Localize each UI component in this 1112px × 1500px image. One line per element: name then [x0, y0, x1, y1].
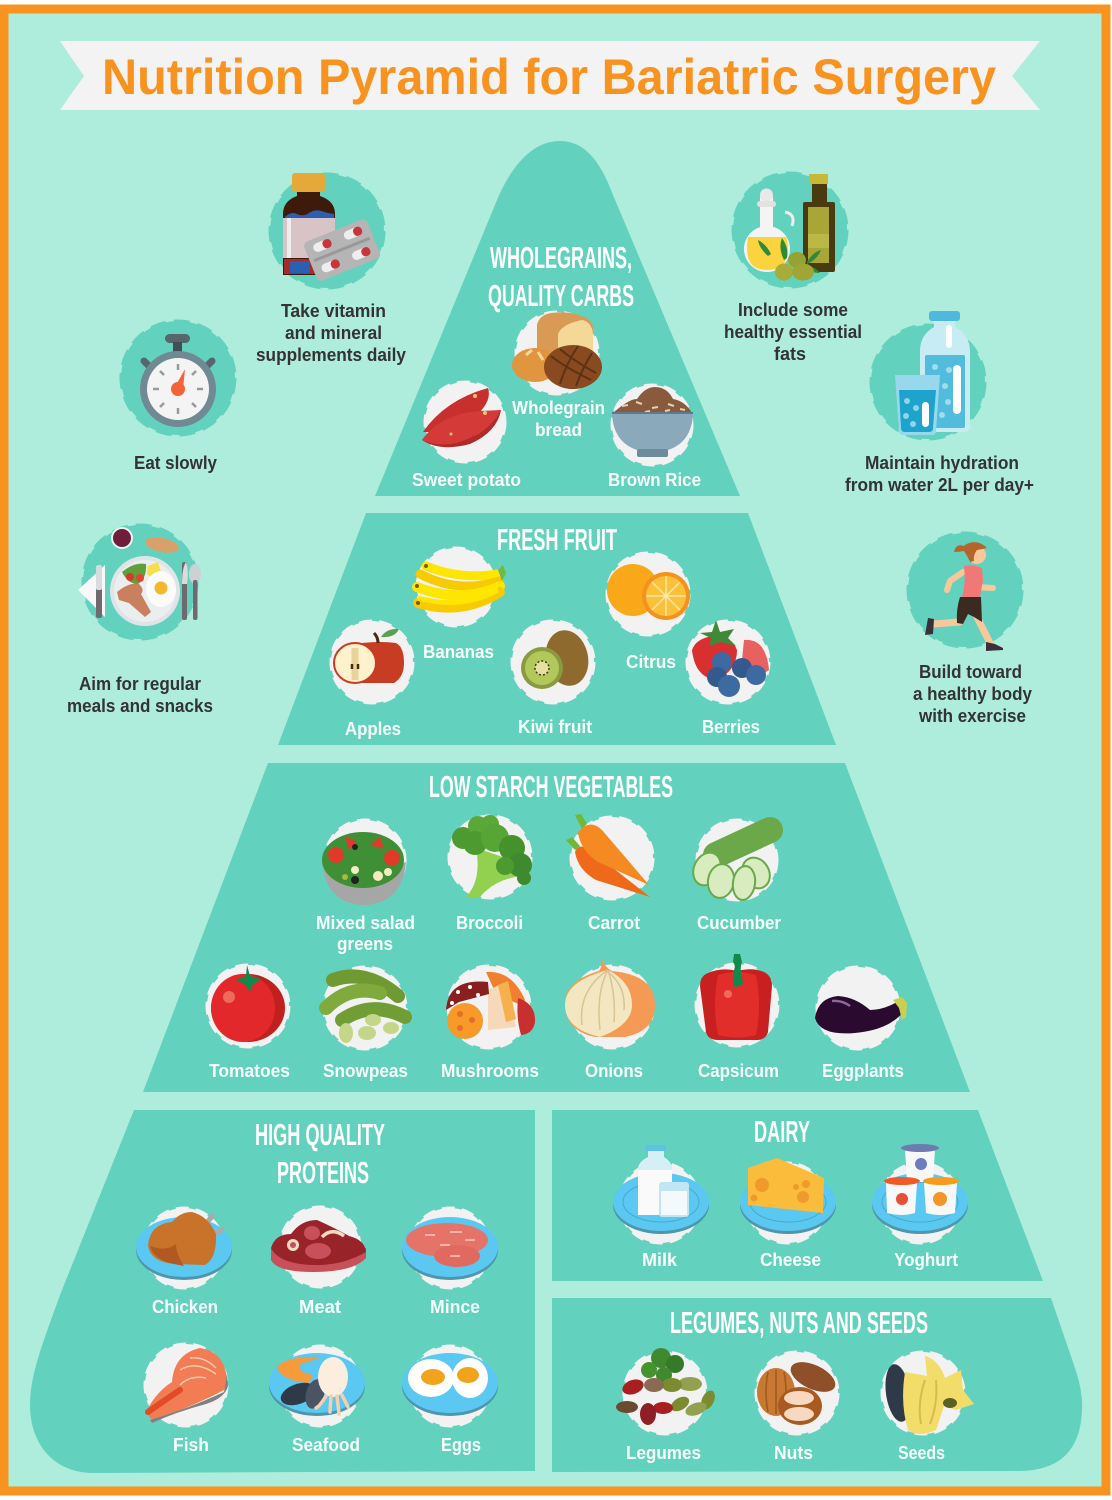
tip: vitamins: Take vitamin — [281, 301, 386, 321]
item: citrus — [607, 553, 690, 672]
item: mince — [402, 1208, 498, 1317]
item: meat — [271, 1207, 366, 1317]
item: tomatoes — [207, 965, 290, 1081]
heading: vegetables: LOW STARCH VEGETABLES — [429, 769, 673, 804]
tip: exercise: with exercise — [918, 706, 1026, 726]
item: chicken — [136, 1208, 232, 1317]
item: eggs — [402, 1346, 498, 1455]
tip: regular meals: Aim for regular — [79, 674, 201, 694]
tip: hydration: Maintain hydration — [865, 453, 1019, 473]
item: wholegrain bread: Wholegrain — [512, 398, 605, 418]
item: tomatoes: Tomatoes — [209, 1061, 290, 1081]
tip: regular meals: meals and snacks — [67, 696, 213, 716]
panel: fresh fruit — [278, 513, 836, 745]
item: seeds — [882, 1352, 974, 1463]
item: broccoli: Broccoli — [456, 913, 523, 933]
item: bananas: Bananas — [423, 642, 494, 662]
item: brown rice: Brown Rice — [608, 470, 701, 490]
panel: legumes, nuts and seeds — [552, 1298, 1082, 1472]
tip: essential fats: Include some — [738, 300, 848, 320]
tip: vitamins: and mineral — [285, 323, 382, 343]
item: eggplants: Eggplants — [822, 1061, 904, 1081]
heading: proteins: PROTEINS — [277, 1155, 369, 1190]
tip: exercise: a healthy body — [913, 684, 1032, 704]
item: seeds: Seeds — [898, 1443, 945, 1463]
item: fish — [145, 1344, 228, 1455]
tip: exercise: Build toward — [919, 662, 1022, 682]
item: yoghurt: Yoghurt — [894, 1250, 958, 1270]
item: carrot: Carrot — [588, 913, 640, 933]
item: mince: Mince — [430, 1297, 480, 1317]
tip: eat slowly — [121, 321, 235, 473]
item: wholegrain bread — [512, 312, 605, 440]
item: fish: Fish — [173, 1435, 209, 1455]
item: mushrooms: Mushrooms — [441, 1061, 539, 1081]
tip: essential fats: fats — [774, 344, 806, 364]
item: berries: Berries — [702, 717, 760, 737]
item: legumes — [616, 1348, 718, 1463]
tip: essential fats: healthy essential — [724, 322, 862, 342]
item: onions: Onions — [585, 1061, 643, 1081]
panel: wholegrains — [375, 141, 740, 496]
item: cucumber — [688, 820, 781, 933]
heading: dairy: DAIRY — [754, 1114, 810, 1149]
tip: hydration — [845, 311, 1034, 495]
item: sweet potato: Sweet potato — [412, 470, 521, 490]
item: snowpeas: Snowpeas — [323, 1061, 408, 1081]
title banner: Nutrition Pyramid for Bariatric Surgery — [102, 49, 996, 105]
heading: wholegrains: QUALITY CARBS — [488, 278, 634, 313]
tip: regular meals — [67, 525, 213, 716]
panel: high quality proteins — [30, 1110, 535, 1473]
tip: hydration: from water 2L per day+ — [845, 475, 1034, 495]
item: kiwi fruit — [512, 621, 594, 737]
heading: proteins — [255, 1117, 385, 1190]
heading: legumes: LEGUMES, NUTS AND SEEDS — [670, 1305, 928, 1340]
item: eggs: Eggs — [441, 1435, 481, 1455]
item: meat: Meat — [299, 1297, 341, 1317]
tip: vitamins: supplements daily — [256, 345, 406, 365]
tip: vitamins — [256, 173, 406, 365]
item: sweet potato — [412, 382, 521, 490]
item: chicken: Chicken — [152, 1297, 218, 1317]
item: apples: Apples — [345, 719, 401, 739]
item: seafood: Seafood — [292, 1435, 360, 1455]
tip: exercise — [908, 533, 1032, 726]
item: berries — [687, 620, 769, 737]
item: wholegrain bread: bread — [535, 420, 582, 440]
item: cucumber: Cucumber — [697, 913, 781, 933]
panel: low starch vegetables — [143, 763, 970, 1092]
item: kiwi fruit: Kiwi fruit — [518, 717, 592, 737]
heading: fresh fruit: FRESH FRUIT — [497, 522, 617, 557]
item: carrot — [566, 814, 653, 933]
item: broccoli — [449, 815, 532, 933]
item: capsicum: Capsicum — [698, 1061, 779, 1081]
item: snowpeas — [323, 967, 408, 1081]
item: mushrooms — [441, 966, 539, 1081]
item: capsicum — [696, 954, 779, 1081]
item: brown rice — [608, 385, 701, 490]
item: legumes: Legumes — [626, 1443, 701, 1463]
item: citrus: Citrus — [626, 652, 676, 672]
item: milk: Milk — [642, 1250, 678, 1270]
item: mixed salad greens — [316, 820, 415, 954]
heading: wholegrains: WHOLEGRAINS, — [490, 240, 632, 275]
item: mixed salad greens: Mixed salad — [316, 913, 415, 933]
item: eggplants — [815, 967, 907, 1081]
item: onions — [565, 957, 655, 1081]
item: bananas — [415, 548, 506, 662]
item: cheese: Cheese — [760, 1250, 821, 1270]
item: nuts: Nuts — [774, 1443, 813, 1463]
item: yoghurt — [872, 1144, 968, 1270]
item: apples — [331, 621, 413, 739]
tip: eat slowly: Eat slowly — [134, 453, 217, 473]
item: nuts — [756, 1352, 840, 1463]
tip: essential fats — [724, 173, 862, 364]
item: milk — [613, 1145, 709, 1270]
heading: wholegrains — [488, 240, 634, 313]
heading: proteins: HIGH QUALITY — [255, 1117, 385, 1152]
item: cheese — [740, 1158, 836, 1270]
item: mixed salad greens: greens — [337, 934, 393, 954]
panel: dairy — [552, 1110, 1043, 1281]
item: seafood — [269, 1346, 365, 1455]
